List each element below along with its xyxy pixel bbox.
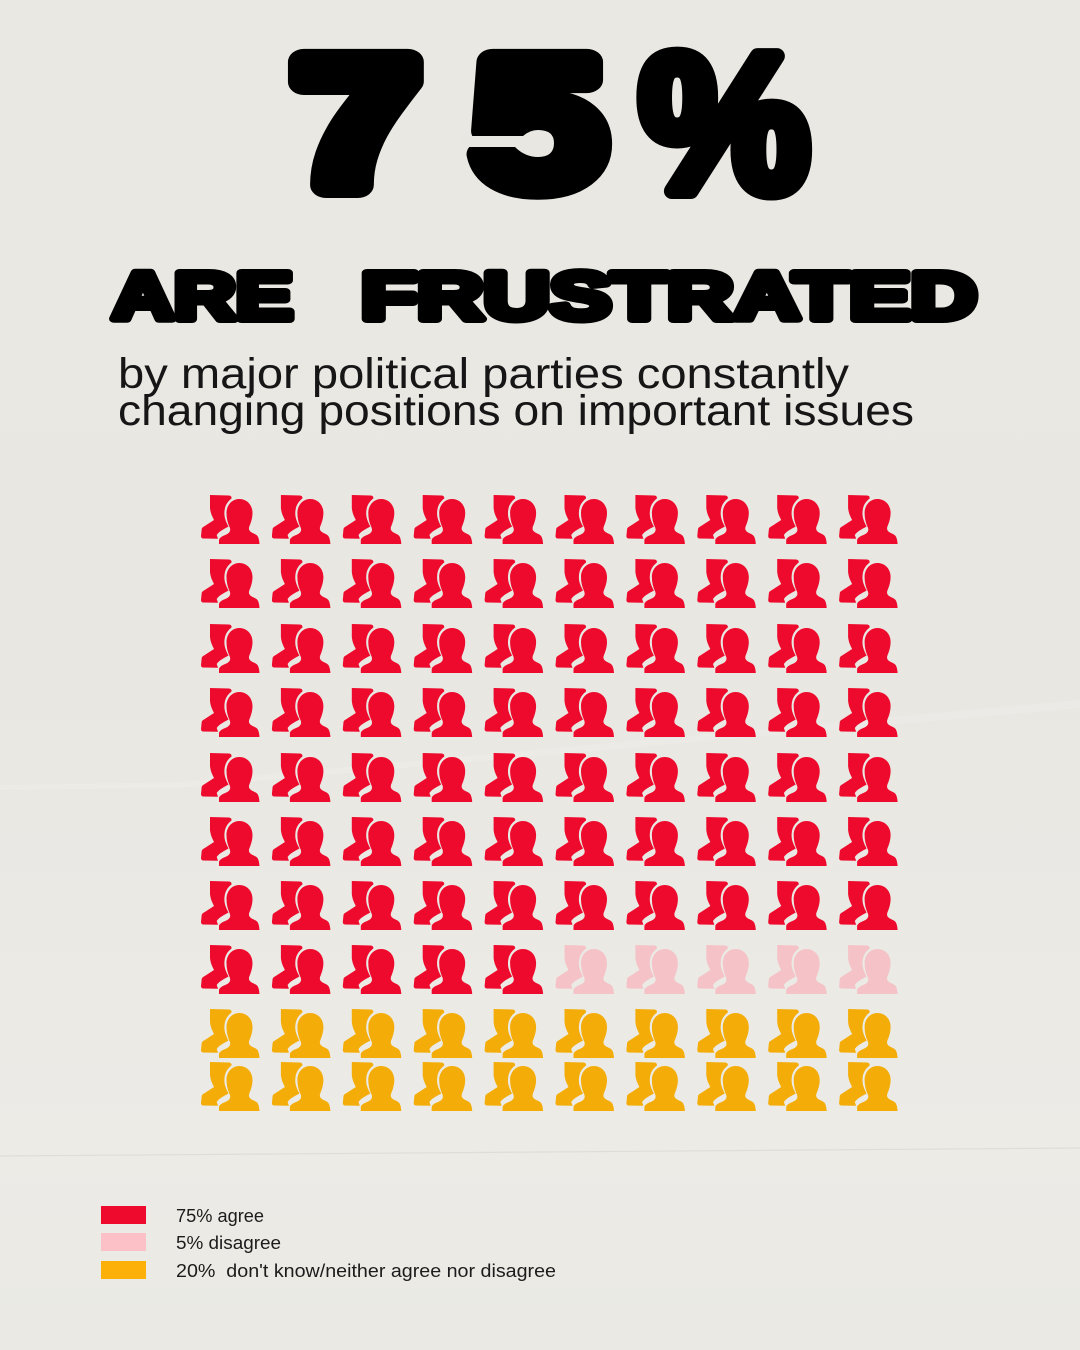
- row 1: agree: [201, 495, 898, 544]
- row 8: agree half: [201, 945, 543, 994]
- subheading: [118, 350, 914, 435]
- heading: are frustrated: [112, 259, 977, 334]
- legend item: disagree: [101, 1232, 281, 1253]
- row 7: agree: [201, 881, 898, 930]
- row 10: don't know: [201, 1062, 898, 1111]
- title: 75%: 5: [476, 23, 602, 223]
- subheading: by major political parties constantly: [118, 350, 850, 398]
- title: 75%: [294, 14, 809, 233]
- legend item: don't know: 20% don't know/neither agree nor disagree: [176, 1260, 556, 1281]
- row 6: agree: [201, 817, 898, 866]
- title: 75%: 7: [294, 23, 418, 223]
- subheading: changing positions on important issues: [118, 387, 914, 435]
- row 9: don't know: [201, 1009, 898, 1058]
- title: 75%: %: [639, 14, 809, 233]
- row 4: agree: [201, 688, 898, 737]
- legend item: disagree: 5% disagree: [176, 1232, 281, 1253]
- row 2: agree: [201, 559, 898, 608]
- pictogram chart: 100 people: [201, 495, 898, 1111]
- row 3: agree: [201, 624, 898, 673]
- row 5: agree: [201, 753, 898, 802]
- heading: are frustrated: FRUSTRATED: [361, 259, 977, 334]
- row 8: disagree half: [556, 945, 898, 994]
- legend item: agree: 75% agree: [176, 1205, 264, 1226]
- legend item: agree: [101, 1205, 264, 1226]
- legend: [101, 1205, 556, 1281]
- heading: are frustrated: ARE: [112, 259, 293, 334]
